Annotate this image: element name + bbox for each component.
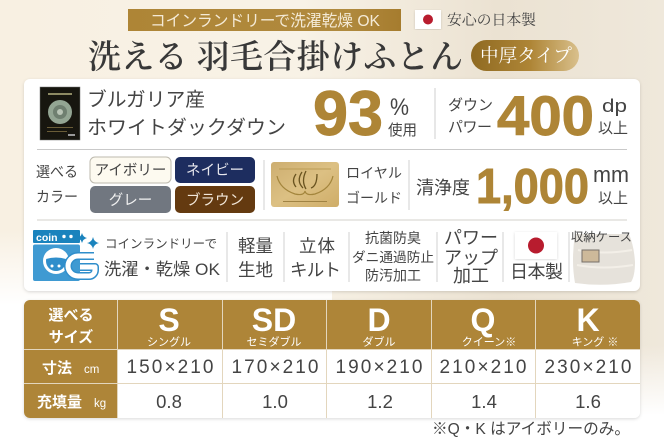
stat: down power 400dp [448,84,628,147]
text: power-up processing: 加工 [453,266,489,286]
color options: ネイビー [186,162,244,179]
color options: ブラウン [186,191,244,209]
text: power-up processing: アップ [444,248,498,268]
table header: row labels [37,307,106,411]
column: Q [440,302,526,412]
text: coin laundry washable [104,237,221,279]
text: Bulgarian white duck down: ホワイトダックダウン [87,117,286,139]
column: Q: 1.4 [471,391,497,412]
badge: safe Japan made [415,10,536,29]
text: coin laundry washable: コインランドリーで [105,237,217,251]
icon: Bulgarian down certificate [40,87,80,140]
column: Q: クイーン※ [462,336,516,348]
stat: cleanliness 1,000mm: 以上 [598,190,628,207]
stat: 93%: % [390,94,409,121]
text: antibacterial features: 抗菌防臭 [365,230,421,246]
text: Bulgarian white duck down: ブルガリア産 [87,88,205,111]
text: royal gold: ゴールド [346,190,402,206]
text: power-up processing [444,228,498,286]
column: K: 1.6 [575,391,601,412]
column: K: 230×210 [544,357,632,378]
column: S [126,302,214,412]
title: 洗える 羽毛合掛けふとん [88,39,463,76]
stat: down power 400dp: パワー [448,119,492,136]
stat: cleanliness 1,000mm: 清浄度 [416,178,470,198]
icon: Japan flag [515,232,557,259]
icon: royal gold label [271,162,339,207]
column: D: 1.2 [367,391,393,412]
column: Q: Q [471,302,495,338]
table header: row labels: 選べる [48,307,94,324]
column: Q: 210×210 [440,357,526,378]
text: 3D quilt [290,236,341,280]
icon: storage case: 収納ケース [571,229,632,244]
stat: cleanliness 1,000mm: 1,000 [476,160,589,214]
table header: row labels: 寸法 [42,359,72,377]
table header: row labels: cm [84,364,99,376]
size table [24,300,640,418]
badge: safe Japan made: 安心の日本製 [447,11,536,29]
text: 3D quilt: キルト [290,260,341,280]
color options: カラー [36,190,78,206]
stat: cleanliness 1,000mm: mm [593,162,629,187]
column: K: キング ※ [572,334,618,348]
banner: coin laundry [128,9,401,31]
column: SD: 1.0 [262,391,288,412]
column: SD: 170×210 [232,357,318,378]
text: coin laundry washable: 洗濯・乾燥 OK [104,260,221,279]
stat: cleanliness 1,000mm [416,160,629,214]
column: S: シングル [147,334,191,348]
banner: coin laundry: コインランドリーで洗濯乾燥 OK [150,12,380,30]
footnote: ※Q・K はアイボリーのみ。 [432,420,630,438]
color options [36,157,255,213]
column: D: 190×210 [336,357,422,378]
text: antibacterial features: ダニ通過防止 [352,250,434,265]
text: power-up processing: パワー [444,228,498,248]
color options: アイボリー [95,162,166,179]
stat: down power 400dp: ダウン [448,97,493,114]
stat: down power 400dp: dp [602,96,627,116]
stat: 93% [313,79,417,149]
text: lightweight fabric [238,236,273,280]
text: lightweight fabric: 軽量 [238,236,273,256]
column: D [336,302,422,412]
column: S: 150×210 [126,357,214,378]
table header: row labels: サイズ [49,328,93,346]
column: D: ダブル [362,334,396,348]
icon: coin laundry logo [33,230,99,281]
text: antibacterial features [352,230,434,284]
table header: row labels: kg [94,398,106,410]
icon: storage case [571,229,635,285]
stat: 93%: 使用 [388,122,417,139]
column: D: D [367,302,391,338]
text: antibacterial features: 防汚加工 [365,268,421,284]
color options: 選べる [36,164,78,181]
text: royal gold [346,165,402,206]
pill: medium thick type [471,40,579,71]
color options: グレー [109,192,152,209]
icon: coin laundry logo: coin [36,232,58,244]
column: S: S [158,302,180,338]
stat: 93%: 93 [313,79,383,149]
panel: features [24,79,640,291]
column: SD: SD [252,302,296,338]
column: SD [232,302,318,412]
text: made in Japan: 日本製 [510,262,563,282]
column: K [544,302,632,412]
text: royal gold: ロイヤル [346,165,402,181]
column: K: K [576,302,600,338]
text: Bulgarian white duck down [87,88,286,139]
stat: down power 400dp: 以上 [598,120,628,137]
column: S: 0.8 [156,391,182,412]
table header: row labels: 充填量 [37,393,82,411]
text: lightweight fabric: 生地 [238,260,273,280]
pill: medium thick type: 中厚タイプ [480,46,572,67]
stat: down power 400dp: 400 [497,84,594,147]
column: SD: セミダブル [246,334,302,348]
text: 3D quilt: 立体 [299,236,336,256]
